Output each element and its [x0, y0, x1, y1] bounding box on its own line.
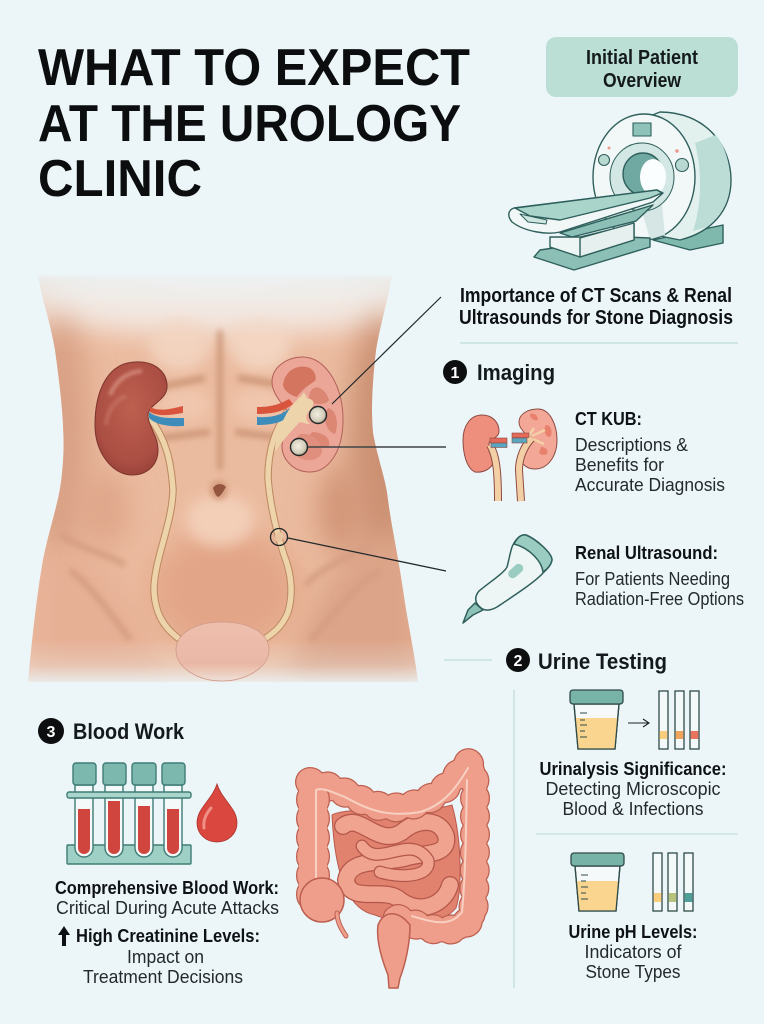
ureters: [150, 408, 291, 638]
text: CT KUB: [575, 409, 725, 495]
text: urine pH levels: Urine pH Levels:: [568, 922, 698, 942]
section heading: urine testing: 2: [514, 653, 523, 670]
text: CT KUB: CT KUB:: [575, 409, 642, 429]
badge: initial patient overview: [546, 37, 738, 97]
text: CT KUB: Benefits for: [575, 455, 664, 475]
section heading: imaging: [443, 360, 555, 385]
title: CLINIC: [38, 150, 202, 208]
text: comprehensive blood work: Critical During Acute Attacks: [56, 898, 279, 918]
text: urinalysis significance: [540, 759, 726, 819]
text: CT KUB: Descriptions &: [575, 435, 688, 455]
text: comprehensive blood work: Impact on: [127, 947, 204, 967]
icon: cup with pH strips: [571, 853, 693, 911]
colon: [300, 762, 475, 988]
title: AT THE UROLOGY: [38, 95, 461, 153]
icon: ultrasound probe: [463, 535, 552, 623]
section heading: imaging: 1: [451, 365, 460, 382]
heading: importance of CT scans: [459, 285, 733, 329]
illustration: intestines: [300, 762, 475, 988]
text: urinalysis significance: Detecting Microscopic: [546, 779, 720, 799]
text: renal ultrasound: [575, 543, 744, 609]
text: urine pH levels: Stone Types: [586, 962, 680, 982]
navel: [210, 480, 228, 500]
section heading: urine testing: Urine Testing: [538, 649, 667, 674]
icon: CT scanner: [509, 112, 731, 270]
title: WHAT TO EXPECT: [38, 39, 470, 97]
badge: initial patient overview: Initial Patient: [586, 47, 698, 69]
text: renal ultrasound: Radiation-Free Options: [575, 589, 744, 609]
small intestine: [332, 805, 460, 923]
text: comprehensive blood work: High Creatinine Levels:: [76, 926, 260, 946]
section heading: imaging: Imaging: [477, 360, 555, 385]
icon: urine cup with strips: [570, 690, 699, 749]
text: urinalysis significance: Urinalysis Significance:: [540, 759, 726, 779]
title: [38, 39, 470, 208]
heading: importance of CT scans: Importance of CT Scans & Renal: [460, 285, 732, 307]
text: renal ultrasound: For Patients Needing: [575, 569, 730, 589]
section heading: blood work: 3: [47, 724, 56, 741]
icon: blood drop: [197, 784, 237, 842]
heading: importance of CT scans: Ultrasounds for Stone Diagnosis: [459, 307, 733, 329]
section heading: blood work: [38, 718, 185, 744]
text: comprehensive blood work: [55, 878, 279, 987]
torso illustration: [20, 265, 430, 690]
badge: initial patient overview: Overview: [603, 70, 681, 92]
text: renal ultrasound: Renal Ultrasound:: [575, 543, 718, 563]
kidney right, cross-section: [257, 357, 343, 472]
text: urine pH levels: Indicators of: [584, 942, 682, 962]
text: urinalysis significance: Blood & Infections: [562, 799, 704, 819]
text: comprehensive blood work: Comprehensive Blood Work:: [55, 878, 279, 898]
icon: blood tubes in rack: [67, 763, 191, 864]
text: comprehensive blood work: Treatment Decisions: [83, 967, 243, 987]
text: urine pH levels: [568, 922, 698, 982]
bladder: [176, 622, 269, 681]
icon: kidneys small: [463, 409, 557, 501]
text: CT KUB: Accurate Diagnosis: [575, 475, 725, 495]
kidney left, exterior: [95, 362, 184, 475]
section heading: blood work: Blood Work: [73, 719, 185, 744]
callout lines and stone markers: [270, 297, 446, 571]
